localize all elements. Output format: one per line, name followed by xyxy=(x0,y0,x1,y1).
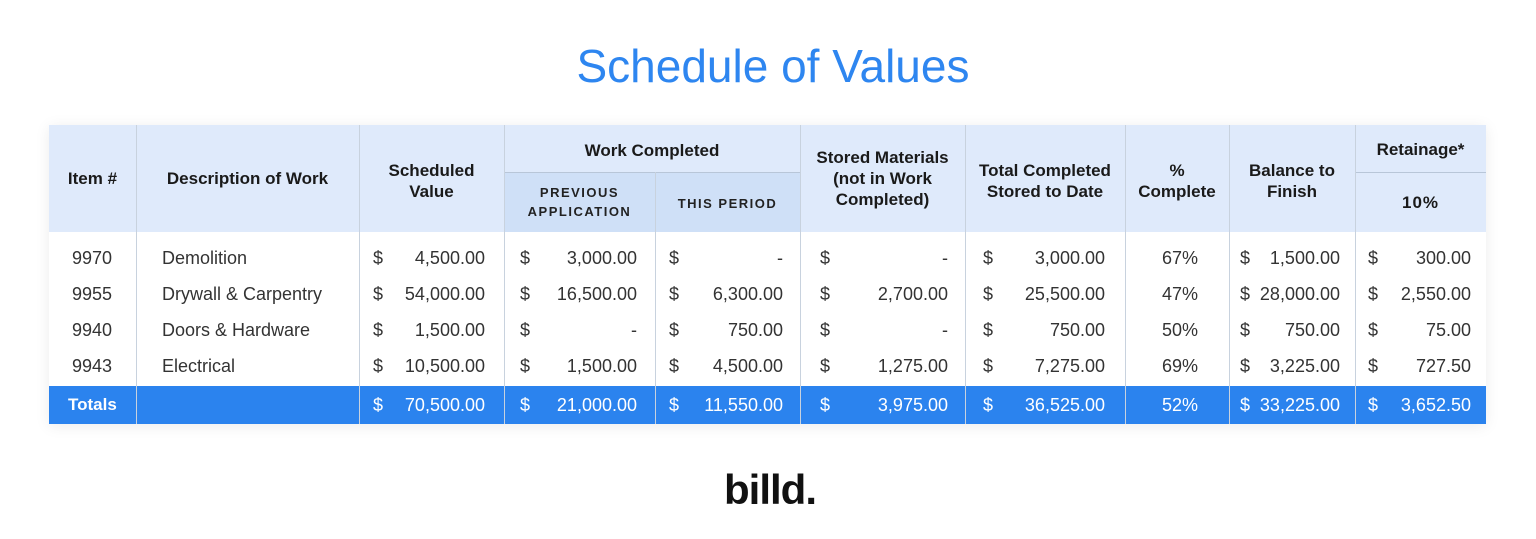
row 9955: 47% xyxy=(1162,284,1198,304)
header: total completed: Stored to Date xyxy=(987,182,1103,201)
totals row: $ xyxy=(1240,395,1250,415)
row 9940 xyxy=(72,320,1471,340)
row 9940: 9940 xyxy=(72,320,112,340)
row 9943: $ xyxy=(373,356,383,376)
totals row: 3,652.50 xyxy=(1401,395,1471,415)
header: balance xyxy=(1249,161,1335,201)
row 9943: 3,225.00 xyxy=(1270,356,1340,376)
header: 10%: 10% xyxy=(1402,192,1439,212)
row 9940: 750.00 xyxy=(1285,320,1340,340)
row 9940: - xyxy=(942,320,948,340)
row 9955: Drywall & Carpentry xyxy=(162,284,322,304)
row 9970: $ xyxy=(373,248,383,268)
row 9955: 25,500.00 xyxy=(1025,284,1105,304)
row 9955: $ xyxy=(520,284,530,304)
header: work completed: Work Completed xyxy=(585,140,719,160)
row 9955: $ xyxy=(1240,284,1250,304)
header: stored materials: Stored Materials xyxy=(816,148,949,167)
row 9940: $ xyxy=(820,320,830,340)
table: schedule of values xyxy=(49,125,1486,424)
totals row: $ xyxy=(983,395,993,415)
title: Schedule of Values xyxy=(576,40,969,92)
header: stored materials: Completed) xyxy=(836,190,929,209)
totals row: $ xyxy=(669,395,679,415)
header: scheduled value: Scheduled xyxy=(389,161,474,180)
row 9955: $ xyxy=(669,284,679,304)
row 9940: $ xyxy=(373,320,383,340)
row 9943: Electrical xyxy=(162,356,235,376)
row 9943: $ xyxy=(1368,356,1378,376)
totals row: 33,225.00 xyxy=(1260,395,1340,415)
row 9943: 727.50 xyxy=(1416,356,1471,376)
header: stored materials xyxy=(816,148,949,209)
header: retainage: Retainage* xyxy=(1377,140,1464,158)
header: balance: Balance to xyxy=(1249,161,1335,180)
totals row xyxy=(68,395,1471,415)
row 9955: 6,300.00 xyxy=(713,284,783,304)
row 9955: $ xyxy=(373,284,383,304)
header: percent complete: Complete xyxy=(1138,182,1216,201)
row 9955: 54,000.00 xyxy=(405,284,485,304)
row 9970: $ xyxy=(520,248,530,268)
row 9970: $ xyxy=(669,248,679,268)
subheader cells xyxy=(504,172,800,232)
logo: billd: billd. xyxy=(724,466,816,513)
header: percent complete xyxy=(1138,161,1216,201)
header: total completed xyxy=(979,161,1111,201)
row 9940: $ xyxy=(1368,320,1378,340)
header: previous application xyxy=(528,185,631,219)
row 9943: 7,275.00 xyxy=(1035,356,1105,376)
header: total completed: Total Completed xyxy=(979,161,1111,180)
totals row: $ xyxy=(1368,395,1378,415)
row 9970: 4,500.00 xyxy=(415,248,485,268)
row 9970: 300.00 xyxy=(1416,248,1471,268)
totals row: 36,525.00 xyxy=(1025,395,1105,415)
row 9943: 1,275.00 xyxy=(878,356,948,376)
row 9940: $ xyxy=(669,320,679,340)
row 9940: $ xyxy=(1240,320,1250,340)
row 9940: 750.00 xyxy=(728,320,783,340)
row 9955: $ xyxy=(1368,284,1378,304)
totals bar xyxy=(49,386,1486,424)
row 9940: $ xyxy=(983,320,993,340)
header: stored materials: (not in Work xyxy=(833,169,932,188)
row 9955: $ xyxy=(983,284,993,304)
totals row: $ xyxy=(520,395,530,415)
totals row: $ xyxy=(373,395,383,415)
totals row: 21,000.00 xyxy=(557,395,637,415)
header: previous application: APPLICATION xyxy=(528,204,631,219)
header: this period: THIS PERIOD xyxy=(678,196,777,210)
row 9955: 9955 xyxy=(72,284,112,304)
row 9943: $ xyxy=(983,356,993,376)
totals row: 11,550.00 xyxy=(704,395,783,415)
row 9955: 16,500.00 xyxy=(557,284,637,304)
header: item: Item # xyxy=(68,169,117,188)
header: previous application: PREVIOUS xyxy=(540,185,619,200)
totals row: Totals xyxy=(68,395,117,414)
row 9940: 750.00 xyxy=(1050,320,1105,340)
row 9970: $ xyxy=(1368,248,1378,268)
row 9970 xyxy=(72,248,1471,268)
row 9970: 3,000.00 xyxy=(567,248,637,268)
row 9970: 1,500.00 xyxy=(1270,248,1340,268)
row 9970: 9970 xyxy=(72,248,112,268)
row 9943: 4,500.00 xyxy=(713,356,783,376)
header: balance: Finish xyxy=(1267,182,1317,201)
row 9943: 69% xyxy=(1162,356,1198,376)
row 9970: 67% xyxy=(1162,248,1198,268)
row 9955: 2,550.00 xyxy=(1401,284,1471,304)
row 9943: 9943 xyxy=(72,356,112,376)
row 9940: - xyxy=(631,320,637,340)
row 9943 xyxy=(72,356,1471,376)
totals row: 52% xyxy=(1162,395,1198,415)
header: description: Description of Work xyxy=(167,169,328,188)
row 9970: 3,000.00 xyxy=(1035,248,1105,268)
row 9970: $ xyxy=(1240,248,1250,268)
row 9955 xyxy=(72,284,1471,304)
row 9970: Demolition xyxy=(162,248,247,268)
row 9970: $ xyxy=(983,248,993,268)
row 9943: $ xyxy=(820,356,830,376)
row 9970: - xyxy=(942,248,948,268)
row 9943: $ xyxy=(520,356,530,376)
row 9955: $ xyxy=(820,284,830,304)
totals row: $ xyxy=(820,395,830,415)
row 9940: 75.00 xyxy=(1426,320,1471,340)
header background xyxy=(49,125,1486,232)
row 9940: 1,500.00 xyxy=(415,320,485,340)
row 9970: $ xyxy=(820,248,830,268)
row 9955: 28,000.00 xyxy=(1260,284,1340,304)
row 9943: 1,500.00 xyxy=(567,356,637,376)
header: percent complete: % xyxy=(1169,161,1185,180)
row 9940: $ xyxy=(520,320,530,340)
row 9955: 2,700.00 xyxy=(878,284,948,304)
row 9943: $ xyxy=(1240,356,1250,376)
row 9943: $ xyxy=(669,356,679,376)
header: scheduled value xyxy=(389,161,474,201)
row 9940: Doors & Hardware xyxy=(162,320,310,340)
totals row: 70,500.00 xyxy=(405,395,485,415)
header: scheduled value: Value xyxy=(409,182,454,201)
row 9940: 50% xyxy=(1162,320,1198,340)
row 9943: 10,500.00 xyxy=(405,356,485,376)
row 9970: - xyxy=(777,248,783,268)
totals row: 3,975.00 xyxy=(878,395,948,415)
